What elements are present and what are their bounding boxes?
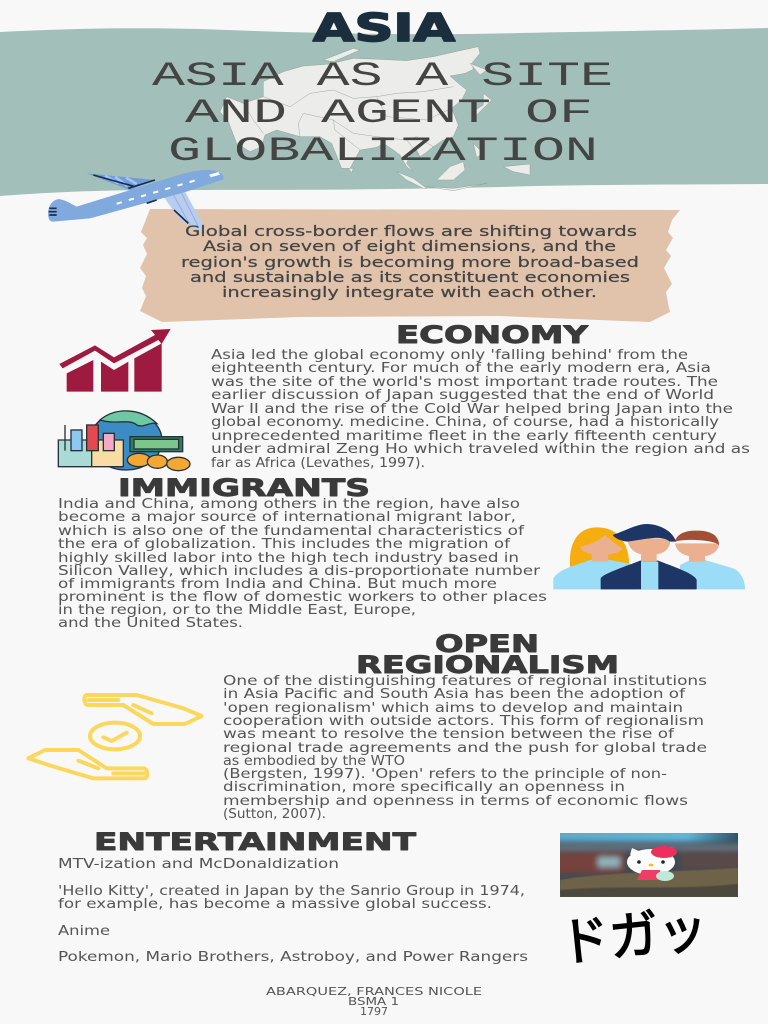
footer credits bbox=[266, 986, 482, 1018]
text block: entertainment: for example, has become a massive global success. bbox=[58, 897, 492, 912]
intro text bbox=[181, 224, 639, 301]
text block: economy: unprecedented maritime fleet in the early fifteenth century bbox=[211, 429, 717, 444]
text block: open regionalism: 'open regionalism' which aims to develop and maintain bbox=[223, 701, 683, 716]
icon: airplane bbox=[48, 170, 224, 232]
subtitle: GLOBALIZATION bbox=[168, 133, 598, 171]
text block: entertainment: Pokemon, Mario Brothers, Astroboy, and Power Rangers bbox=[58, 950, 528, 965]
heading: open regionalism bbox=[356, 630, 619, 679]
heading: open regionalism: OPEN bbox=[435, 630, 539, 658]
icon: world economy bbox=[58, 411, 190, 471]
text block: economy: earlier discussion of Japan suggested that the end of World bbox=[211, 388, 714, 403]
text block: open regionalism: membership and openness in terms of economic flows bbox=[223, 794, 688, 809]
footer credits: 1797 bbox=[360, 1006, 388, 1018]
photo: Hello Kitty figure bbox=[560, 833, 738, 897]
text block: immigrants: and the United States. bbox=[58, 616, 243, 631]
text block: open regionalism: cooperation with outside actors. This form of regionalism bbox=[223, 714, 704, 729]
text block: economy: global economy. medicine. China, of course, had a historically bbox=[211, 415, 719, 430]
text block: immigrants: in the region, or to the Middle East, Europe, bbox=[58, 603, 416, 618]
text block: immigrants: of immigrants from India and China. But much more bbox=[58, 577, 497, 592]
text block: open regionalism: regional trade agreements and the push for global trade bbox=[223, 741, 707, 756]
icon: growth chart bbox=[59, 329, 171, 392]
text block: open regionalism: (Sutton, 2007). bbox=[223, 807, 326, 822]
icon: katakana brush lettering: ドガッ bbox=[556, 886, 711, 976]
heading: immigrants: IMMIGRANTS bbox=[118, 474, 370, 502]
text block: open regionalism: as embodied by the WTO bbox=[223, 754, 405, 769]
text block: immigrants: become a major source of international migrant labor, bbox=[58, 510, 516, 525]
intro text: region's growth is becoming more broad-based bbox=[181, 255, 639, 271]
text block: economy: under admiral Zeng Ho which traveled within the region and as bbox=[211, 442, 750, 457]
text block: open regionalism: was meant to resolve the tension between the rise of bbox=[223, 727, 674, 742]
footer credits: BSMA 1 bbox=[348, 996, 399, 1008]
panel: intro callout background bbox=[140, 209, 680, 322]
text block: economy: War II and the rise of the Cold War helped bring Japan into the bbox=[211, 402, 733, 417]
text block: open regionalism: in Asia Pacific and South Asia has been the adoption of bbox=[223, 687, 685, 702]
text block: immigrants: highly skilled labor into the high tech industry based in bbox=[58, 551, 519, 566]
text block: open regionalism: discrimination, more specifically an openness in bbox=[223, 780, 625, 795]
text block: open regionalism: One of the distinguishing features of regional institutions bbox=[223, 674, 707, 689]
subtitle: ASIA AS A SITE bbox=[152, 58, 613, 96]
text block: economy: far as Africa (Levathes, 1997). bbox=[211, 456, 425, 471]
subtitle: AND AGENT OF bbox=[185, 95, 593, 133]
heading: open regionalism: REGIONALISM bbox=[356, 651, 619, 679]
footer credits: ABARQUEZ, FRANCES NICOLE bbox=[266, 986, 482, 998]
text block: economy: eighteenth century. For much of the early modern era, Asia bbox=[211, 361, 711, 376]
text block: open regionalism: (Bergsten, 1997). 'Open' refers to the principle of non- bbox=[223, 767, 667, 782]
map of Asia bbox=[220, 47, 530, 191]
text block: entertainment: MTV-ization and McDonaldization bbox=[58, 857, 339, 872]
text block: immigrants: India and China, among others in the region, have also bbox=[58, 497, 520, 512]
text block: immigrants: Silicon Valley, which includes a dis-proportionate number bbox=[58, 564, 541, 579]
intro text: Asia on seven of eight dimensions, and the bbox=[203, 239, 616, 255]
text block: entertainment: 'Hello Kitty', created in Japan by the Sanrio Group in 1974, bbox=[58, 884, 525, 899]
heading: economy: ECONOMY bbox=[396, 321, 589, 349]
text block: entertainment: Anime bbox=[58, 924, 110, 939]
text block: entertainment bbox=[58, 857, 528, 965]
intro text: increasingly integrate with each other. bbox=[222, 285, 597, 301]
banner: teal brush band bbox=[0, 28, 768, 196]
text block: immigrants: the era of globalization. This includes the migration of bbox=[58, 537, 510, 552]
heading: entertainment: ENTERTAINMENT bbox=[94, 828, 417, 856]
text block: immigrants: prominent is the flow of domestic workers to other places bbox=[58, 590, 547, 605]
text block: immigrants bbox=[58, 497, 547, 631]
subtitle bbox=[152, 58, 613, 171]
text block: open regionalism bbox=[223, 674, 707, 822]
text block: immigrants: which is also one of the fundamental characteristics of bbox=[58, 524, 525, 539]
text block: economy: Asia led the global economy only 'falling behind' from the bbox=[211, 348, 688, 363]
intro text: and sustainable as its constituent economies bbox=[190, 270, 630, 286]
text block: economy bbox=[211, 348, 750, 471]
title: ASIA: ASIA bbox=[313, 6, 456, 50]
text block: economy: was the site of the world's most important trade routes. The bbox=[211, 375, 718, 390]
icon: three people bbox=[553, 524, 745, 589]
icon: hands and check bbox=[28, 695, 202, 778]
intro text: Global cross-border flows are shifting towards bbox=[185, 224, 637, 240]
